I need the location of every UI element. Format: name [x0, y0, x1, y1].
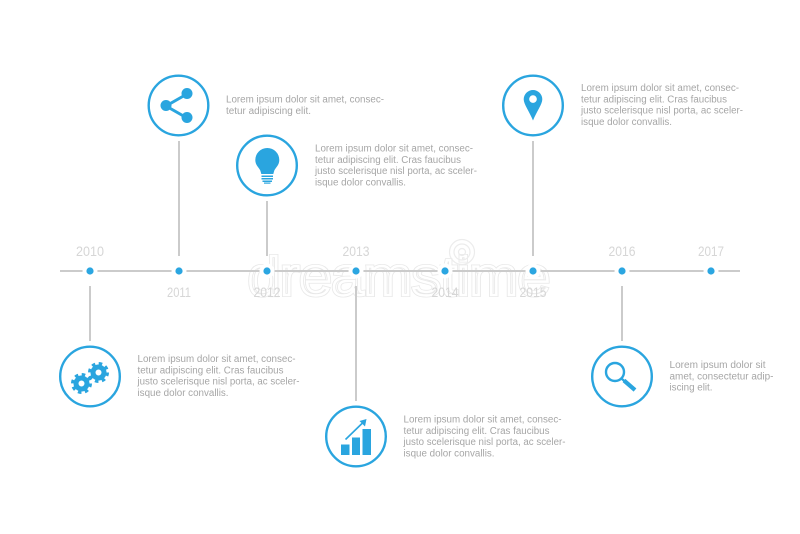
year labels: 2014 — [432, 284, 459, 300]
year labels: 2017 — [698, 243, 724, 259]
text: settings description: justo scelerisque nisl porta, ac sceler- — [137, 377, 300, 388]
year labels: 2012 — [254, 284, 281, 300]
year labels: 2016 — [608, 243, 636, 259]
icon: bar chart with arrow — [341, 419, 371, 455]
text: share description: Lorem ipsum dolor sit amet, consec- — [226, 94, 384, 106]
watermark: dreamstime — [248, 247, 550, 307]
text: idea description: Lorem ipsum dolor sit amet, consec- — [315, 144, 473, 154]
text: search description: amet, consectetur adip- — [670, 371, 774, 382]
year labels — [76, 243, 724, 300]
year labels: 2015 — [520, 284, 547, 300]
text: growth description: justo scelerisque nisl porta, ac sceler- — [403, 437, 566, 448]
milestone 2016: search — [592, 286, 774, 406]
milestone 2013: growth — [326, 286, 566, 466]
icon: magnifier — [606, 363, 635, 390]
watermark: dreamstime — [248, 247, 550, 307]
icon: gears — [72, 364, 108, 392]
text: location description: isque dolor convallis. — [581, 117, 672, 128]
text: search description: iscing elit. — [670, 383, 712, 394]
text: idea description: isque dolor convallis. — [315, 177, 406, 188]
text: growth description: isque dolor convallis. — [404, 448, 494, 459]
milestone 2015: location — [503, 76, 743, 256]
icon: light bulb — [255, 148, 279, 184]
text: growth description: tetur adipiscing elit. Cras faucibus — [404, 426, 550, 437]
text: idea description: tetur adipiscing elit. Cras faucibus — [315, 155, 461, 166]
milestone 2012: idea — [237, 136, 477, 256]
icon: map pin — [524, 90, 542, 120]
year labels: 2011 — [167, 284, 191, 300]
text: location description: tetur adipiscing elit. Cras faucibus — [581, 94, 727, 105]
milestone 2010: settings — [60, 286, 300, 406]
text: location description: Lorem ipsum dolor sit amet, consec- — [581, 83, 739, 94]
icon: share — [160, 88, 192, 123]
timeline axis — [60, 264, 740, 278]
text: share description: tetur adipiscing elit. — [226, 106, 311, 117]
text: settings description: tetur adipiscing elit. Cras faucibus — [138, 365, 284, 376]
year labels: 2013 — [342, 243, 370, 259]
text: location description: justo scelerisque nisl porta, ac sceler- — [580, 106, 743, 117]
text: settings description: isque dolor convallis. — [138, 388, 228, 399]
year labels: 2010 — [76, 243, 104, 259]
text: settings description: Lorem ipsum dolor sit amet, consec- — [138, 354, 296, 365]
text: growth description: Lorem ipsum dolor sit amet, consec- — [404, 414, 562, 426]
text: search description: Lorem ipsum dolor sit — [670, 360, 766, 371]
text: idea description: justo scelerisque nisl porta, ac sceler- — [314, 166, 477, 177]
milestone 2011: share — [149, 76, 384, 256]
